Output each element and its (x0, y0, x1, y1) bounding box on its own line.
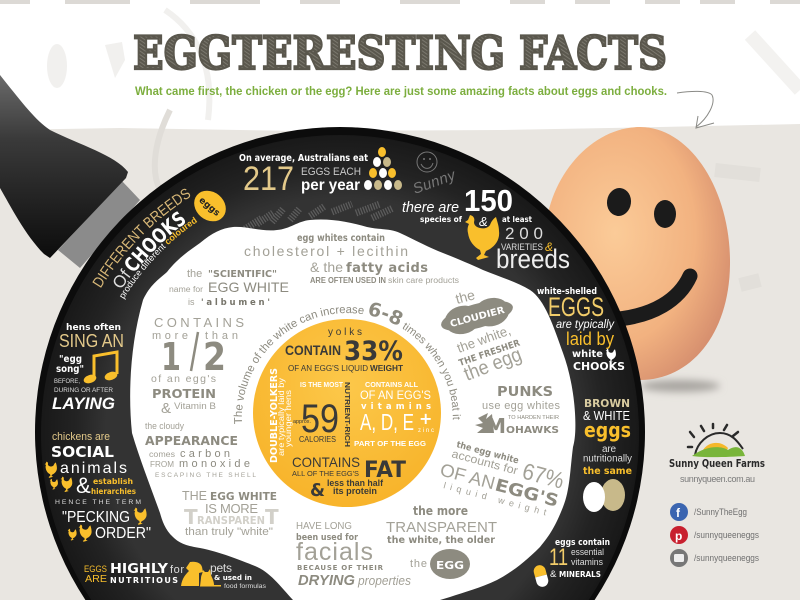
text: the more transparent the older (386, 504, 497, 579)
text: contains more than 1/2: 2 (203, 335, 226, 379)
icon: egg badge (430, 549, 470, 579)
fact: eggs highly nutritious for pets: & used in (214, 574, 252, 582)
pan handle (0, 75, 140, 268)
text: egg whites contain (244, 233, 459, 285)
text: egg whites contain: skin care products (388, 276, 459, 285)
text: contains more than 1/2: CONTAINS (154, 315, 244, 330)
text: egg white is more transparent (182, 488, 279, 538)
text: cloudy appearance: comes (149, 450, 175, 459)
text: the more transparent the older: the more (413, 504, 468, 518)
yolk text: vitamins: zinc (418, 428, 434, 434)
yolk (253, 319, 441, 507)
yolk text: double yolkers: younger hens (284, 390, 293, 447)
icon: cloud: CLOUDIER (449, 305, 507, 330)
text: punks mohawks: use egg whites (482, 400, 560, 412)
yolk text: vitamins: PART OF THE EGG (354, 439, 426, 448)
yolk text: double yolkers: are typically laid by (277, 378, 286, 456)
fact: brown and white eggs: the same (583, 466, 632, 477)
fact: eggs contain 11 vitamins (532, 538, 610, 588)
icon: yellow egg: eggs (197, 196, 221, 219)
fact: chickens are social: SOCIAL (51, 443, 114, 461)
text: cloudy appearance: APPEARANCE (145, 434, 238, 448)
fact: eggs highly nutritious for pets: for (170, 564, 184, 576)
fact: chickens are social (45, 431, 151, 542)
text: scientific name: 'albumen' (201, 298, 270, 308)
fact: brown and white eggs: nutritionally (583, 454, 632, 464)
yolk text: vitamins: + (419, 409, 432, 428)
text: contains more than 1/2: Vitamin B (174, 401, 216, 412)
text: contains more than 1/2: more (152, 330, 188, 342)
text: scientific name: name for (169, 285, 203, 294)
fact: white-shelled eggs: white-shelled (537, 287, 597, 297)
fact: eggs highly nutritious for pets: pets (210, 561, 232, 575)
fact: hens often sing: LAYING (52, 394, 115, 413)
subtitle: What came first, the chicken or the egg? Here are just some amazing facts about eggs and chooks. (135, 84, 667, 98)
yolk text: 59 calories (293, 382, 352, 447)
yolk text: contain 33% (285, 327, 403, 373)
yolk text: contain 33%: 33% (344, 336, 403, 367)
yolk text: contains all the fat: its protein (333, 486, 377, 496)
fact: eggs highly nutritious for pets: NUTRITIOUS (110, 576, 178, 585)
fact: eggs highly nutritious for pets: HIGHLY (110, 562, 169, 577)
icon: white chicken (606, 349, 616, 362)
icon: egg pyramid (364, 147, 402, 190)
fact: 150 species and 200 varieties: & (479, 214, 488, 229)
egg shadow (640, 380, 720, 392)
curved text: volume of the white: The volume of the white can increase 6-8 times when you beat it (234, 302, 461, 424)
icon: sun rays (688, 424, 738, 447)
text: egg whites contain: egg whites contain (297, 233, 385, 244)
fact: brown and white eggs: & WHITE (583, 408, 630, 423)
fact: 150 species and 200 varieties: at least (502, 215, 532, 224)
fact: 150 species and 200 varieties: 150 (464, 183, 513, 218)
text: the cloudier the fresher: the (454, 286, 477, 307)
text: the cloudier the fresher: the egg (461, 344, 525, 386)
text: have long been used for facials: BECAUSE OF THEIR (297, 564, 384, 572)
yolk text: vitamins: A, D, E (360, 409, 414, 435)
text: have long been used for facials: HAVE LONG (296, 521, 352, 532)
feather decoration (245, 204, 393, 229)
fact: eggs contain 11 vitamins: eggs contain (555, 538, 610, 548)
text: have long been used for facials: facials (296, 538, 373, 566)
text: contains more than 1/2: & (161, 400, 171, 417)
text: scientific name: the (187, 268, 202, 280)
fact: 217 eggs per year: EGGS EACH (301, 166, 361, 178)
fact: white-shelled eggs (537, 287, 625, 373)
text: the cloudier the fresher: the white, (455, 323, 513, 356)
egg eye right (654, 200, 676, 228)
text: egg white accounts for 67%: EGG'S (493, 476, 561, 512)
icon: two eggs (583, 479, 625, 512)
fact: 217 eggs per year: On average, Australians eat (239, 153, 368, 164)
title: EGGTERESTING FACTS (133, 26, 667, 80)
icon: music note (83, 352, 118, 385)
social: youtube: /sunnyqueeneggs (694, 553, 759, 563)
text: egg white accounts for 67% (438, 440, 567, 517)
text: cloudy appearance: FROM (150, 460, 174, 469)
fact: 150 species and 200 varieties: & (545, 240, 553, 254)
social: pinterest (670, 526, 759, 544)
fact: 150 species and 200 varieties (402, 183, 570, 274)
fact: different breeds of chooks (92, 188, 226, 300)
yolk text: contain 33%: CONTAIN (285, 342, 341, 358)
yolk text: vitamins (354, 380, 434, 448)
social: pinterest: /sunnyqueeneggs (694, 530, 759, 540)
fact: eggs contain 11 vitamins: vitamins (571, 557, 603, 568)
text: egg white accounts for 67%: accounts for (450, 448, 519, 478)
yolk text: vitamins: vitamins (361, 402, 431, 412)
fact: different breeds of chooks: DIFFERENT BREEDS (92, 188, 190, 288)
fact: 217 eggs per year: per year (301, 177, 360, 194)
fact: brown and white eggs: eggs (584, 418, 631, 442)
egg eye left (605, 186, 633, 218)
frying pan (35, 127, 645, 600)
fact: eggs contain 11 vitamins: essential (571, 547, 604, 558)
text: egg white accounts for 67%: 67% (520, 458, 567, 494)
text: contains more than 1/2: of an egg's (151, 373, 216, 385)
yolk text: contains all the fat: less than half (327, 478, 384, 488)
fact: hens often sing: song" (56, 364, 84, 375)
fact: white-shelled eggs: white (572, 349, 603, 360)
egg smile (606, 276, 690, 320)
fact: different breeds of chooks: CHOOKS (125, 211, 186, 271)
text: scientific name (169, 268, 289, 308)
fact: eggs highly nutritious for pets: ARE (85, 574, 107, 585)
text: the more transparent the older: the (410, 558, 427, 570)
fact: chickens are social: establish (93, 477, 133, 486)
text: egg white is more transparent: RANSPAREN (197, 515, 265, 527)
yolk text: double yolkers: DOUBLE-YOLKERS (269, 368, 280, 463)
text: the more transparent the older: TRANSPARENT (386, 519, 497, 536)
fact: eggs contain 11 vitamins: MINERALS (559, 570, 601, 579)
text: punks mohawks: M (486, 414, 506, 438)
logo: Sunny Queen Farms: sunnyqueen.com.au (680, 474, 755, 484)
fact: hens often sing: hens often (66, 323, 121, 333)
fact: hens often sing: SING AN (59, 331, 124, 351)
text: egg white accounts for 67%: liquid weight (442, 480, 548, 517)
text: cloudy appearance: monoxide (179, 458, 250, 470)
fact: eggs contain 11 vitamins: 11 (549, 544, 568, 571)
yolk text: double yolkers (269, 368, 293, 463)
fact: 150 species and 200 varieties: breeds (496, 244, 570, 274)
sketch: smiley and Sunny: Sunny (411, 166, 459, 198)
fact: 150 species and 200 varieties: species of (420, 215, 463, 224)
text: have long been used for facials: been used for (296, 533, 358, 543)
yolk text: vitamins: OF AN EGG'S (360, 388, 431, 402)
text: have long been used for facials: properties (357, 573, 411, 588)
yolk text: 59 calories: approx. (293, 419, 311, 425)
fact: eggs highly nutritious for pets: food formulas (224, 583, 267, 590)
text: have long been used for facials (296, 521, 411, 589)
icon: spiky mohawk (475, 413, 494, 433)
icon: dog and cat (181, 562, 221, 586)
fact: white-shelled eggs: EGGS (548, 292, 604, 322)
fact: 217 eggs per year: 217 (243, 160, 294, 198)
fact: different breeds of chooks: Of (114, 268, 130, 288)
fact: chickens are social: ORDER" (95, 525, 151, 542)
yolk text: 59 calories: CALORIES (299, 435, 336, 444)
fact: brown and white eggs: are (602, 444, 616, 455)
fact: hens often sing (52, 323, 124, 413)
yolk text: contain 33%: yolks (328, 327, 362, 338)
text: the cloudier the fresher (438, 286, 525, 386)
text: the more transparent the older: EGG (436, 559, 464, 572)
yolk text: contains all the fat: CONTAINS (292, 454, 360, 470)
yolk text: contains all the fat: ALL OF THE EGG'S (292, 469, 359, 478)
text: scientific name: "SCIENTIFIC" (208, 269, 277, 280)
text: egg white is more transparent: IS MORE (205, 501, 258, 516)
yolk text: contains all the fat: & (310, 480, 325, 501)
icon: chicks (45, 462, 147, 542)
sketch: smiley and Sunny (411, 152, 459, 198)
text: scientific name: is (188, 297, 195, 307)
text: egg white accounts for 67%: the egg white (455, 440, 520, 466)
fact: 150 species and 200 varieties: there are (402, 199, 459, 216)
text: contains more than 1/2: 1 (161, 335, 181, 379)
text: egg white is more transparent: than truly "white" (185, 526, 273, 538)
fact: eggs highly nutritious for pets: EGGS (84, 564, 107, 574)
text: egg white is more transparent: T (265, 505, 279, 529)
text: egg whites contain: ARE OFTEN USED IN (310, 276, 386, 285)
text: punks mohawks (475, 385, 560, 438)
text: scientific name: EGG WHITE (208, 279, 289, 295)
text: egg white is more transparent: T (184, 505, 198, 529)
text: the cloudier the fresher: THE FRESHER (458, 339, 522, 369)
icon: yellow egg (188, 184, 232, 228)
text: egg white is more transparent: EGG WHITE (210, 490, 277, 503)
text: egg whites contain: cholesterol + lecithin (244, 243, 408, 259)
arrow pointing to egg (677, 91, 714, 128)
text: egg white accounts for 67%: OF AN (438, 460, 497, 493)
fact: 217 eggs per year (239, 147, 402, 198)
icon: chicken (465, 215, 499, 260)
yolk text: contain 33%: OF AN EGG'S LIQUID (288, 364, 368, 373)
yolk text: contain 33%: WEIGHT (370, 364, 403, 373)
yolk text: contains all the fat (292, 454, 406, 501)
fact: chickens are social: animals (60, 460, 127, 477)
yolk text: contains all the fat: FAT (364, 458, 406, 483)
fact: white-shelled eggs: are typically (556, 317, 615, 331)
fact: hens often sing: BEFORE, (54, 378, 80, 385)
text: egg whites contain: & the (310, 259, 343, 275)
social: facebook: /SunnyTheEgg (694, 507, 747, 517)
text: punks mohawks: TO HARDEN THEIR (508, 415, 559, 421)
text: punks mohawks: PUNKS (497, 385, 553, 400)
fact: white-shelled eggs: CHOOKS (573, 360, 625, 373)
text: have long been used for facials: DRYING (298, 572, 355, 589)
social: youtube (670, 549, 759, 567)
text: contains more than 1/2 (151, 315, 244, 417)
fact: chickens are social: & (76, 473, 91, 498)
social: facebook: f (676, 506, 681, 520)
social: facebook (670, 503, 747, 521)
yolk text: vitamins: CONTAINS ALL (365, 380, 418, 389)
icon: capsule (532, 564, 550, 588)
social: pinterest: p (675, 529, 682, 543)
fact: eggs highly nutritious for pets (84, 561, 267, 590)
text: punks mohawks: OHAWKS (506, 425, 559, 436)
fact: white-shelled eggs: laid by (566, 329, 614, 349)
text: cloudy appearance: ESCAPING THE SHELL (155, 472, 256, 479)
text: egg white is more transparent: THE (182, 488, 207, 503)
text: contains more than 1/2: PROTEIN (152, 386, 216, 401)
fact: brown and white eggs (583, 397, 632, 512)
egg white (130, 219, 575, 600)
yolk text: 59 calories: IS THE MOST (300, 382, 344, 389)
fact: chickens are social: hierarchies (91, 487, 136, 496)
fact: chickens are social: HENCE THE TERM (55, 499, 141, 506)
fact: chickens are social: "PECKING (62, 509, 130, 526)
logo: Sunny Queen Farms: Sunny Queen Farms (669, 458, 765, 470)
fact: chickens are social: chickens are (52, 431, 110, 443)
yolk text: 59 calories: NUTRIENT-RICH (343, 382, 352, 447)
logo: Sunny Queen Farms (669, 424, 765, 484)
text: contains more than 1/2: than (205, 330, 238, 342)
fact: brown and white eggs: BROWN (584, 397, 630, 410)
fact: 150 species and 200 varieties: 200 (505, 224, 543, 243)
text: the more transparent the older: the white, the older (387, 535, 495, 546)
fact: hens often sing: DURING OR AFTER (54, 387, 113, 394)
fact: hens often sing: "egg (59, 354, 82, 365)
fact: different breeds of chooks: produce different coloured (120, 216, 198, 300)
text: cloudy appearance (145, 421, 256, 479)
fact: eggs contain 11 vitamins: & (550, 569, 557, 580)
yolk text: 59 calories: 59 (301, 397, 339, 441)
text: cloudy appearance: carbon (180, 448, 230, 460)
egg character (545, 127, 730, 392)
text: egg whites contain: fatty acids (346, 261, 428, 276)
fact: 150 species and 200 varieties: VARIETIES (501, 242, 543, 252)
text: cloudy appearance: the cloudy (145, 421, 184, 431)
